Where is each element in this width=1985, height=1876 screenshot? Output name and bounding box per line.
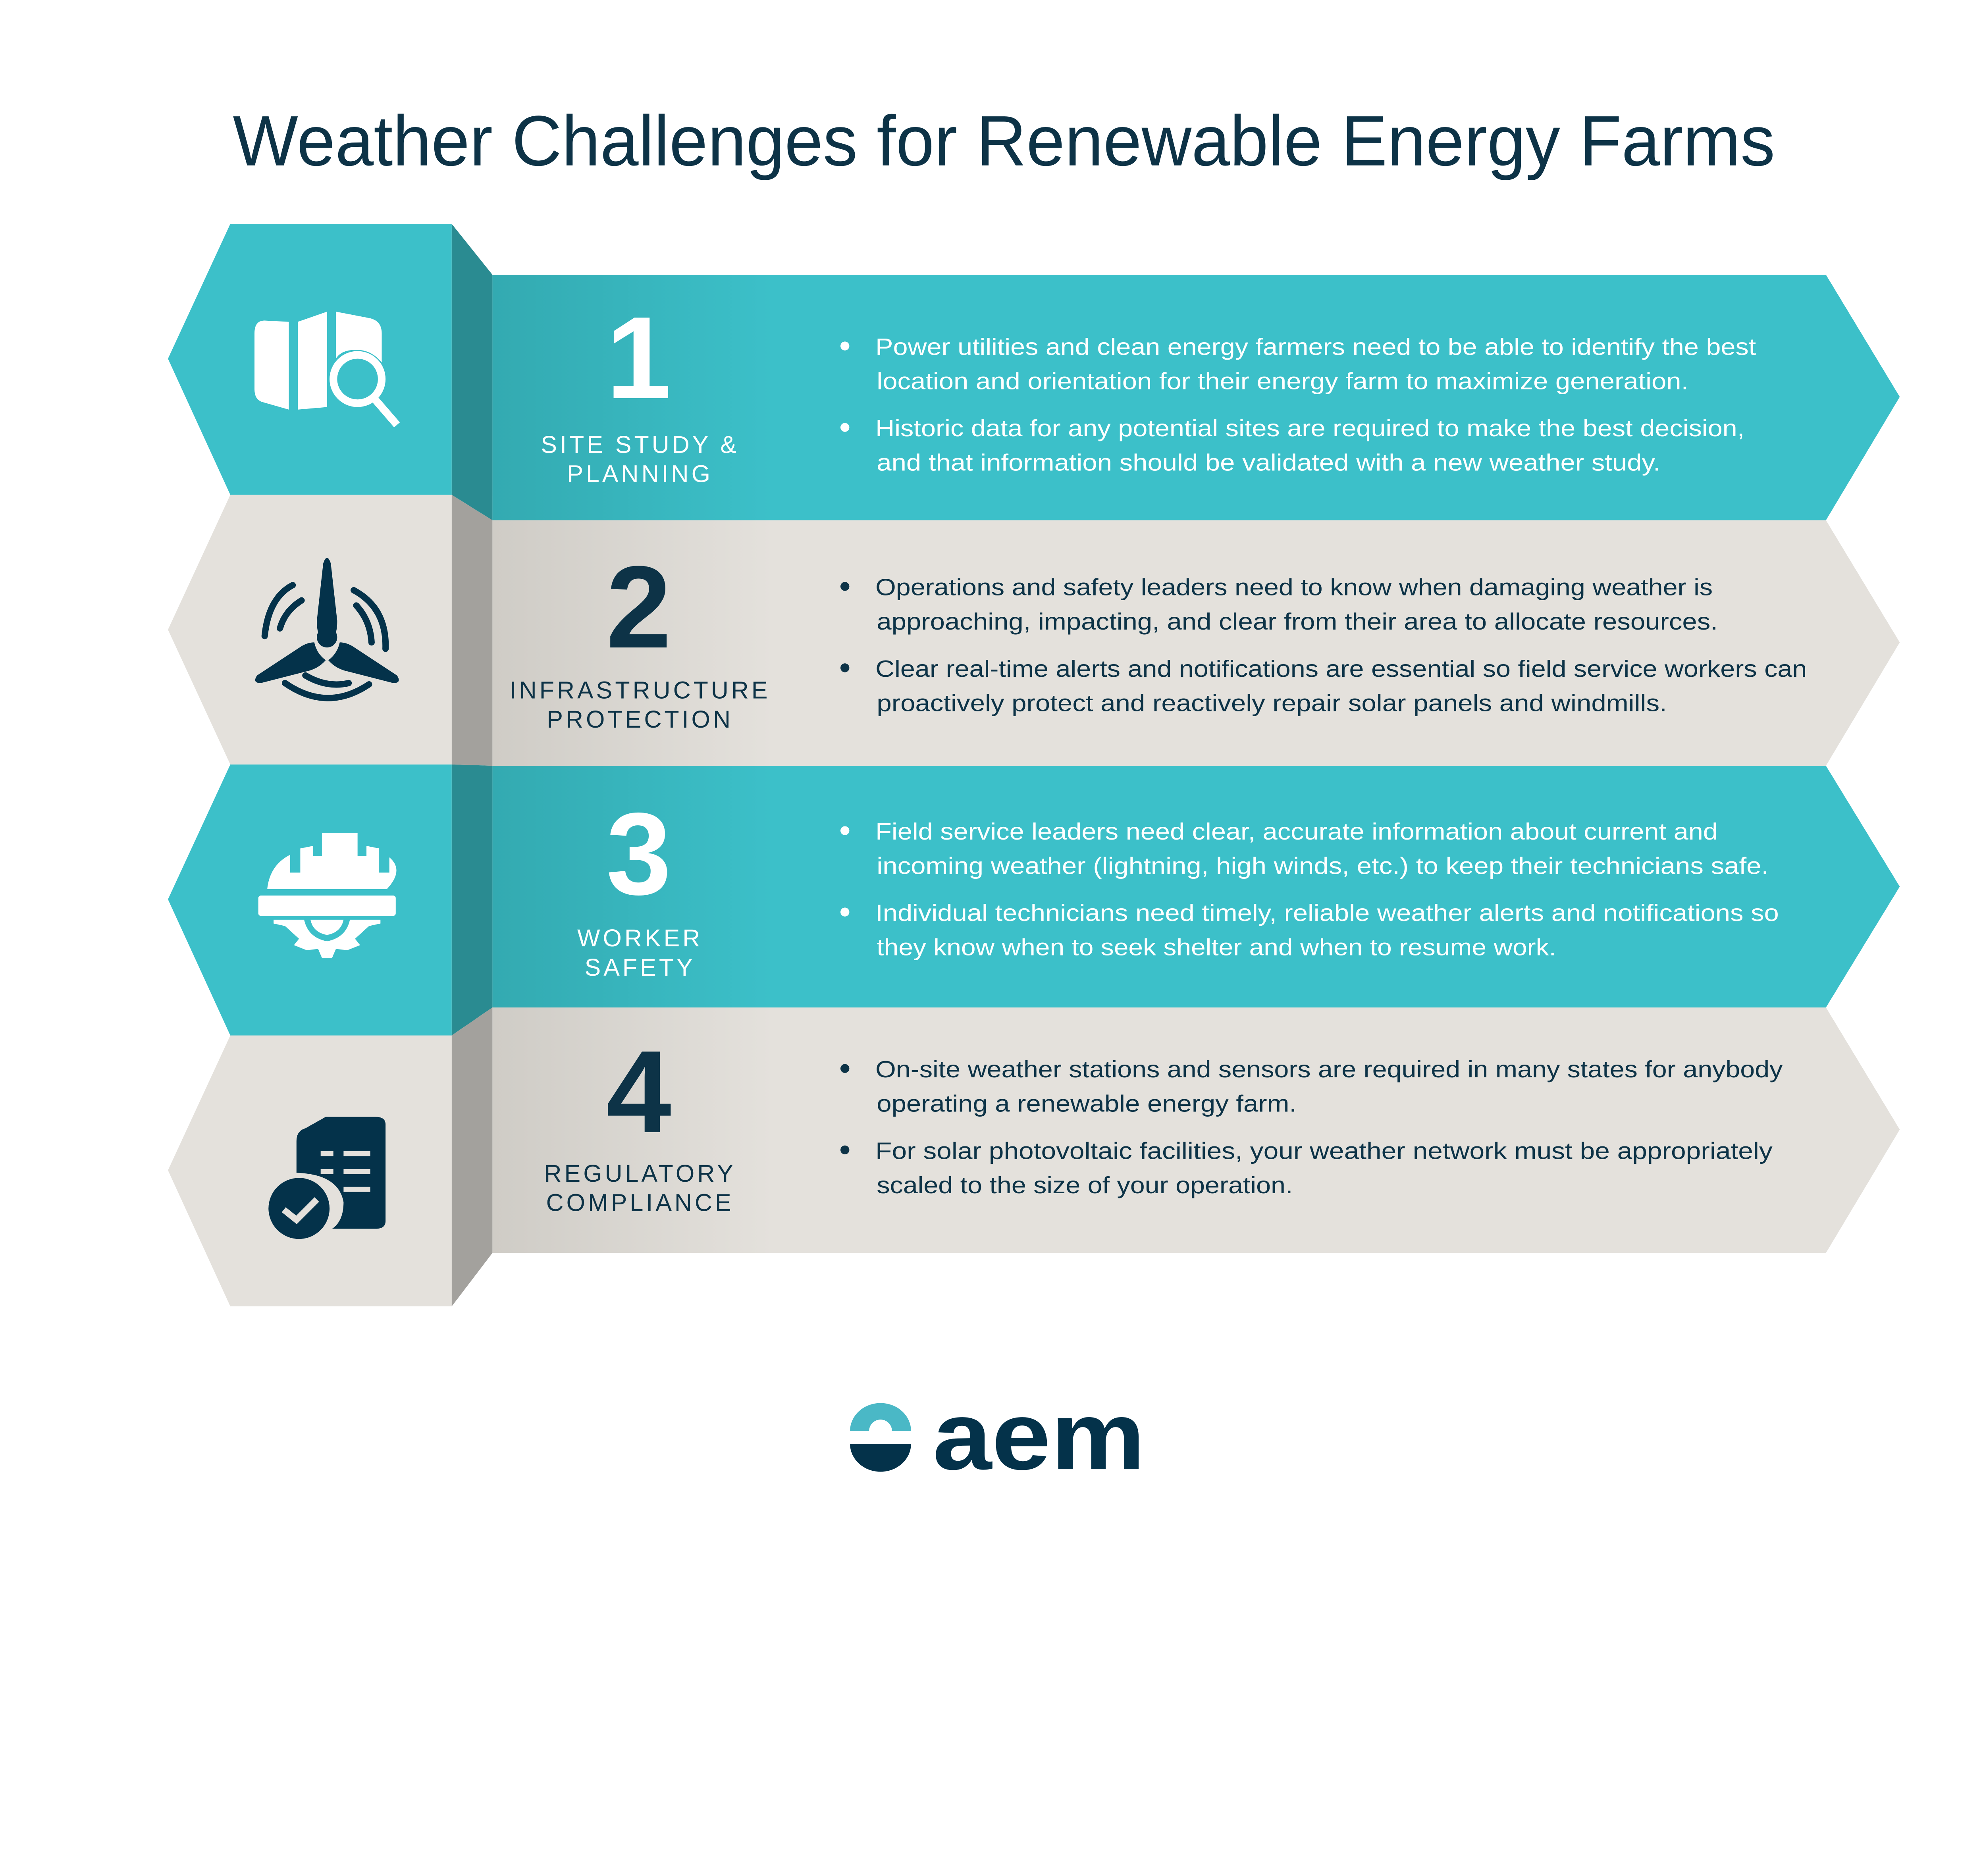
icon: map with magnifier: [254, 312, 397, 425]
title: Weather Challenges for Renewable Energy Farms: [233, 102, 1775, 181]
panel: row 3 worker safety: [168, 765, 1900, 1035]
number and label 2: INFRASTRUCTURE: [510, 676, 771, 703]
bullets row 4: For solar photovoltaic facilities, your weather network must be appropriately: [875, 1137, 1773, 1164]
bullets row 3: [840, 818, 1779, 961]
number and label 1: 1: [606, 293, 671, 423]
bullets row 1: Power utilities and clean energy farmers need to be able to identify the best: [875, 333, 1756, 360]
bullets row 4: [840, 1056, 1783, 1198]
number and label 3: SAFETY: [585, 954, 696, 981]
number and label 4: REGULATORY: [544, 1160, 736, 1187]
bullets row 3: Individual technicians need timely, reliable weather alerts and notifications so: [875, 899, 1779, 926]
panel: row 2 infrastructure: [168, 495, 1900, 766]
number and label 3: WORKER: [577, 925, 703, 951]
number and label 1: PLANNING: [567, 460, 713, 487]
logo: aem: [850, 1382, 1145, 1490]
bullets row 2: Clear real-time alerts and notifications are essential so field service workers can: [875, 655, 1807, 682]
bullets row 1: [840, 333, 1756, 476]
number and label 4: [544, 1027, 736, 1216]
bullets row 4: operating a renewable energy farm.: [877, 1090, 1297, 1117]
number and label 4: 4: [606, 1027, 672, 1157]
bullets row 2: Operations and safety leaders need to know when damaging weather is: [875, 574, 1713, 601]
bullets row 3: Field service leaders need clear, accurate information about current and: [875, 818, 1718, 845]
number and label 2: PROTECTION: [547, 706, 733, 733]
bullets row 4: scaled to the size of your operation.: [877, 1172, 1293, 1198]
bullets row 1: Historic data for any potential sites are required to make the best decision,: [875, 415, 1744, 441]
panel: row 1 site study: [168, 224, 1900, 520]
number and label 2: 2: [606, 542, 671, 672]
bullets row 1: and that information should be validated with a new weather study.: [877, 449, 1661, 476]
bullets row 3: incoming weather (lightning, high winds, etc.) to keep their technicians safe.: [877, 852, 1769, 879]
bullets row 1: location and orientation for their energy farm to maximize generation.: [877, 368, 1688, 395]
bullets row 2: proactively protect and reactively repair solar panels and windmills.: [877, 690, 1667, 716]
bullets row 2: approaching, impacting, and clear from their area to allocate resources.: [877, 608, 1718, 635]
icon: wind turbine: [255, 558, 399, 698]
number and label 1: SITE STUDY &: [541, 431, 739, 458]
number and label 2: [510, 542, 771, 733]
number and label 3: [577, 789, 703, 981]
number and label 1: [541, 293, 739, 487]
number and label 3: 3: [606, 789, 671, 919]
icon: hard hat with gear: [258, 833, 397, 958]
logo: aem: aem: [933, 1382, 1145, 1490]
number and label 4: COMPLIANCE: [546, 1189, 734, 1216]
bullets row 4: On-site weather stations and sensors are required in many states for anybody: [875, 1056, 1783, 1082]
bullets row 3: they know when to seek shelter and when to resume work.: [877, 934, 1556, 961]
panel: row 4 regulatory: [168, 1007, 1900, 1306]
bullets row 2: [840, 574, 1807, 716]
icon: document with check: [268, 1117, 385, 1239]
